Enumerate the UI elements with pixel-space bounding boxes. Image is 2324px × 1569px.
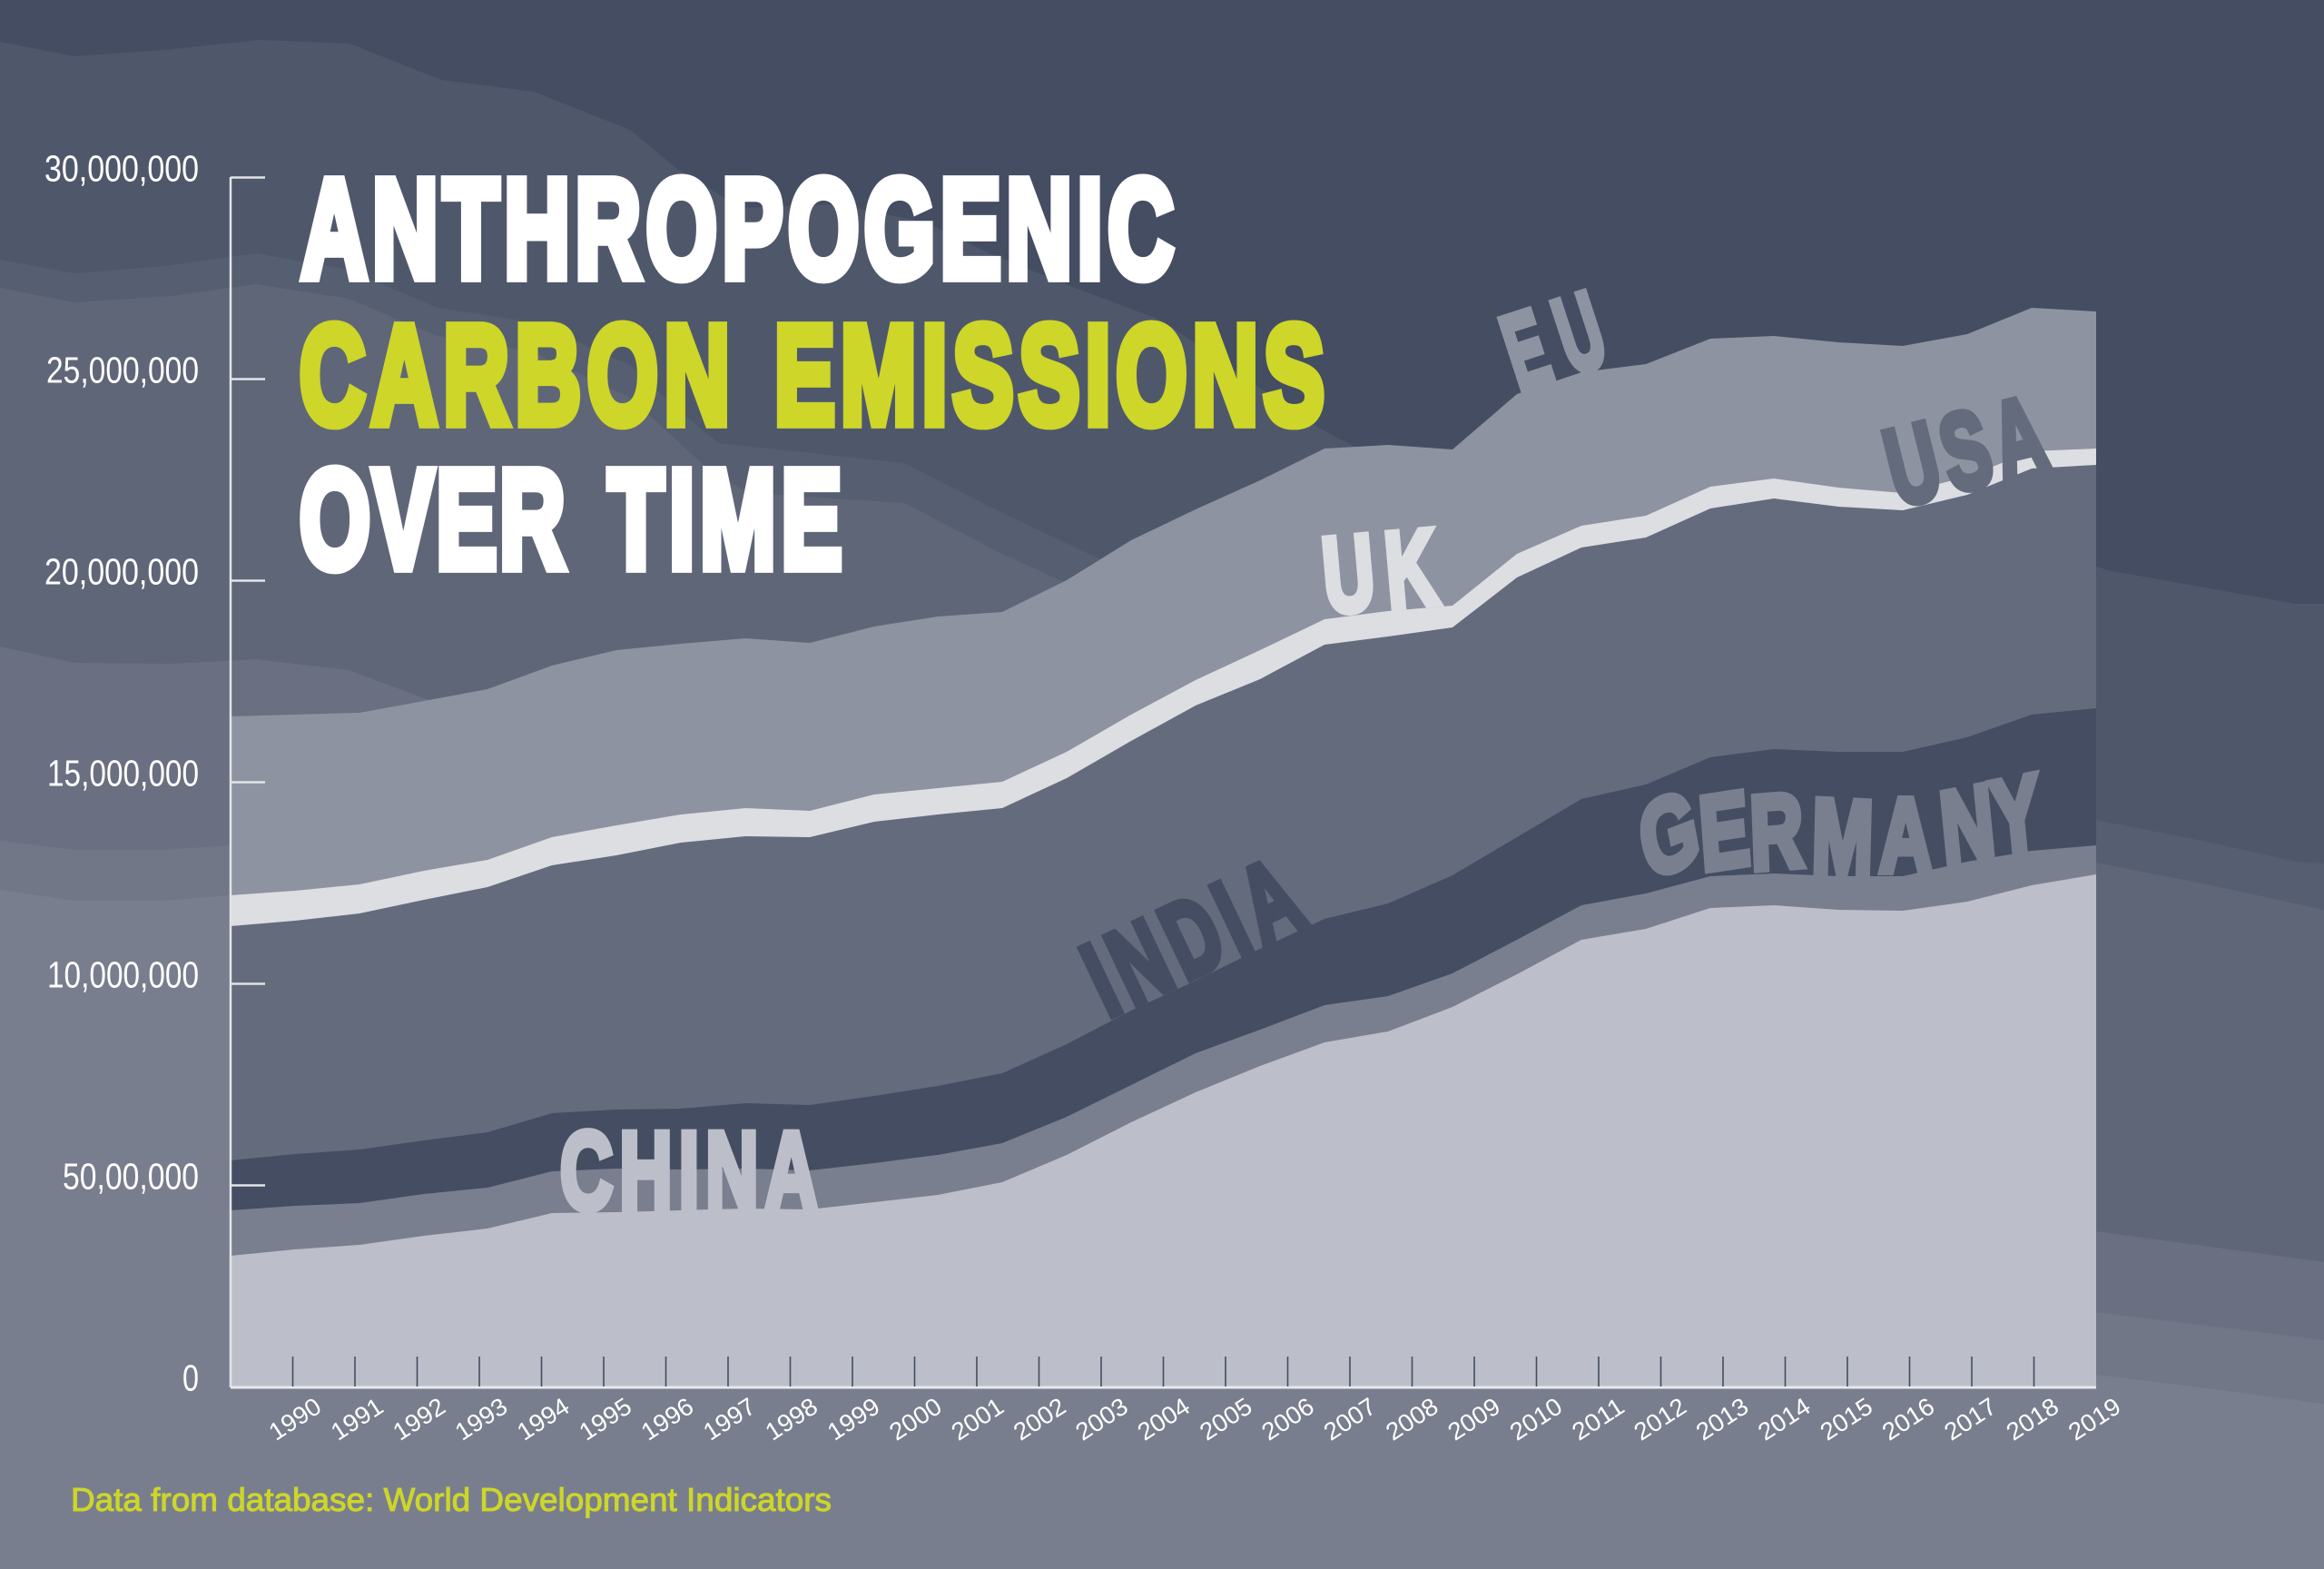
x axis year labels: 1994 <box>512 1393 575 1446</box>
x axis year labels: 1991 <box>326 1393 389 1446</box>
y axis labels: 20,000,000 <box>44 550 199 592</box>
x axis year labels: 1995 <box>575 1393 636 1446</box>
x axis year labels: 2001 <box>947 1393 1009 1446</box>
x axis year labels: 2011 <box>1567 1393 1630 1446</box>
x axis year labels: 1997 <box>698 1393 761 1446</box>
y axis labels: 25,000,000 <box>46 349 199 390</box>
x axis year labels: 2008 <box>1381 1393 1443 1446</box>
x axis year labels: 1993 <box>450 1393 512 1446</box>
x axis year labels: 1990 <box>264 1393 326 1446</box>
x axis year labels <box>264 1393 2125 1446</box>
x axis year labels: 2017 <box>1939 1393 2002 1446</box>
area: USA <box>231 465 2096 1386</box>
title: OVER <box>300 440 566 597</box>
x axis year labels: 2005 <box>1195 1393 1256 1446</box>
title: EMISSIONS <box>774 296 1324 453</box>
x axis year labels: 2002 <box>1009 1393 1070 1446</box>
x axis year labels: 2003 <box>1070 1393 1133 1446</box>
x axis year labels: 2006 <box>1256 1393 1319 1446</box>
source note: Data from database: World Development Indicators <box>71 1481 832 1518</box>
x axis year labels: 2012 <box>1630 1393 1691 1446</box>
x axis year labels: 2004 <box>1133 1393 1195 1446</box>
y axis labels: 50,00,000 <box>63 1155 199 1197</box>
x axis year labels: 2013 <box>1691 1393 1753 1446</box>
y axis labels: 30,000,000 <box>44 147 199 189</box>
y axis with ticks <box>231 177 265 1387</box>
label: India: INDIA <box>1066 835 1319 1039</box>
y axis labels <box>44 147 199 1398</box>
x axis year labels: 1992 <box>389 1393 450 1446</box>
area chart: stacked emissions <box>231 308 2096 1386</box>
label: China: CHINA <box>560 1109 818 1232</box>
x axis year labels: 2019 <box>2063 1393 2125 1446</box>
area: India <box>231 708 2096 1386</box>
x axis year labels: 2014 <box>1753 1393 1816 1446</box>
x axis year labels: 2000 <box>884 1393 947 1446</box>
x axis year labels: 2015 <box>1816 1393 1877 1446</box>
y axis labels: 15,000,000 <box>47 752 199 794</box>
area: EU <box>231 308 2096 1386</box>
area: UK <box>231 449 2096 1386</box>
title: ANTHROPOGENIC <box>301 150 1174 307</box>
x axis year labels: 1999 <box>822 1393 884 1446</box>
x axis year labels: 2009 <box>1443 1393 1505 1446</box>
x axis line and year ticks <box>231 1357 2096 1387</box>
x axis year labels: 1998 <box>761 1393 822 1446</box>
x axis year labels: 2010 <box>1505 1393 1567 1446</box>
area: Germany <box>231 845 2096 1386</box>
x axis year labels: 2007 <box>1319 1393 1381 1446</box>
area: China <box>231 874 2096 1386</box>
title: CARBON <box>300 296 730 453</box>
x axis year labels: 2018 <box>2002 1393 2063 1446</box>
title <box>300 150 1324 597</box>
label: EU: EU <box>1489 271 1619 414</box>
label: USA: USA <box>1874 373 2058 529</box>
x axis year labels: 1996 <box>636 1393 698 1446</box>
label: Germany: GERMANY <box>1630 752 2046 903</box>
title: TIME <box>608 440 842 597</box>
x axis year labels: 2016 <box>1877 1393 1939 1446</box>
label: UK: UK <box>1318 507 1442 636</box>
y axis labels: 10,000,000 <box>47 953 199 995</box>
y axis labels: 0 <box>182 1357 199 1398</box>
